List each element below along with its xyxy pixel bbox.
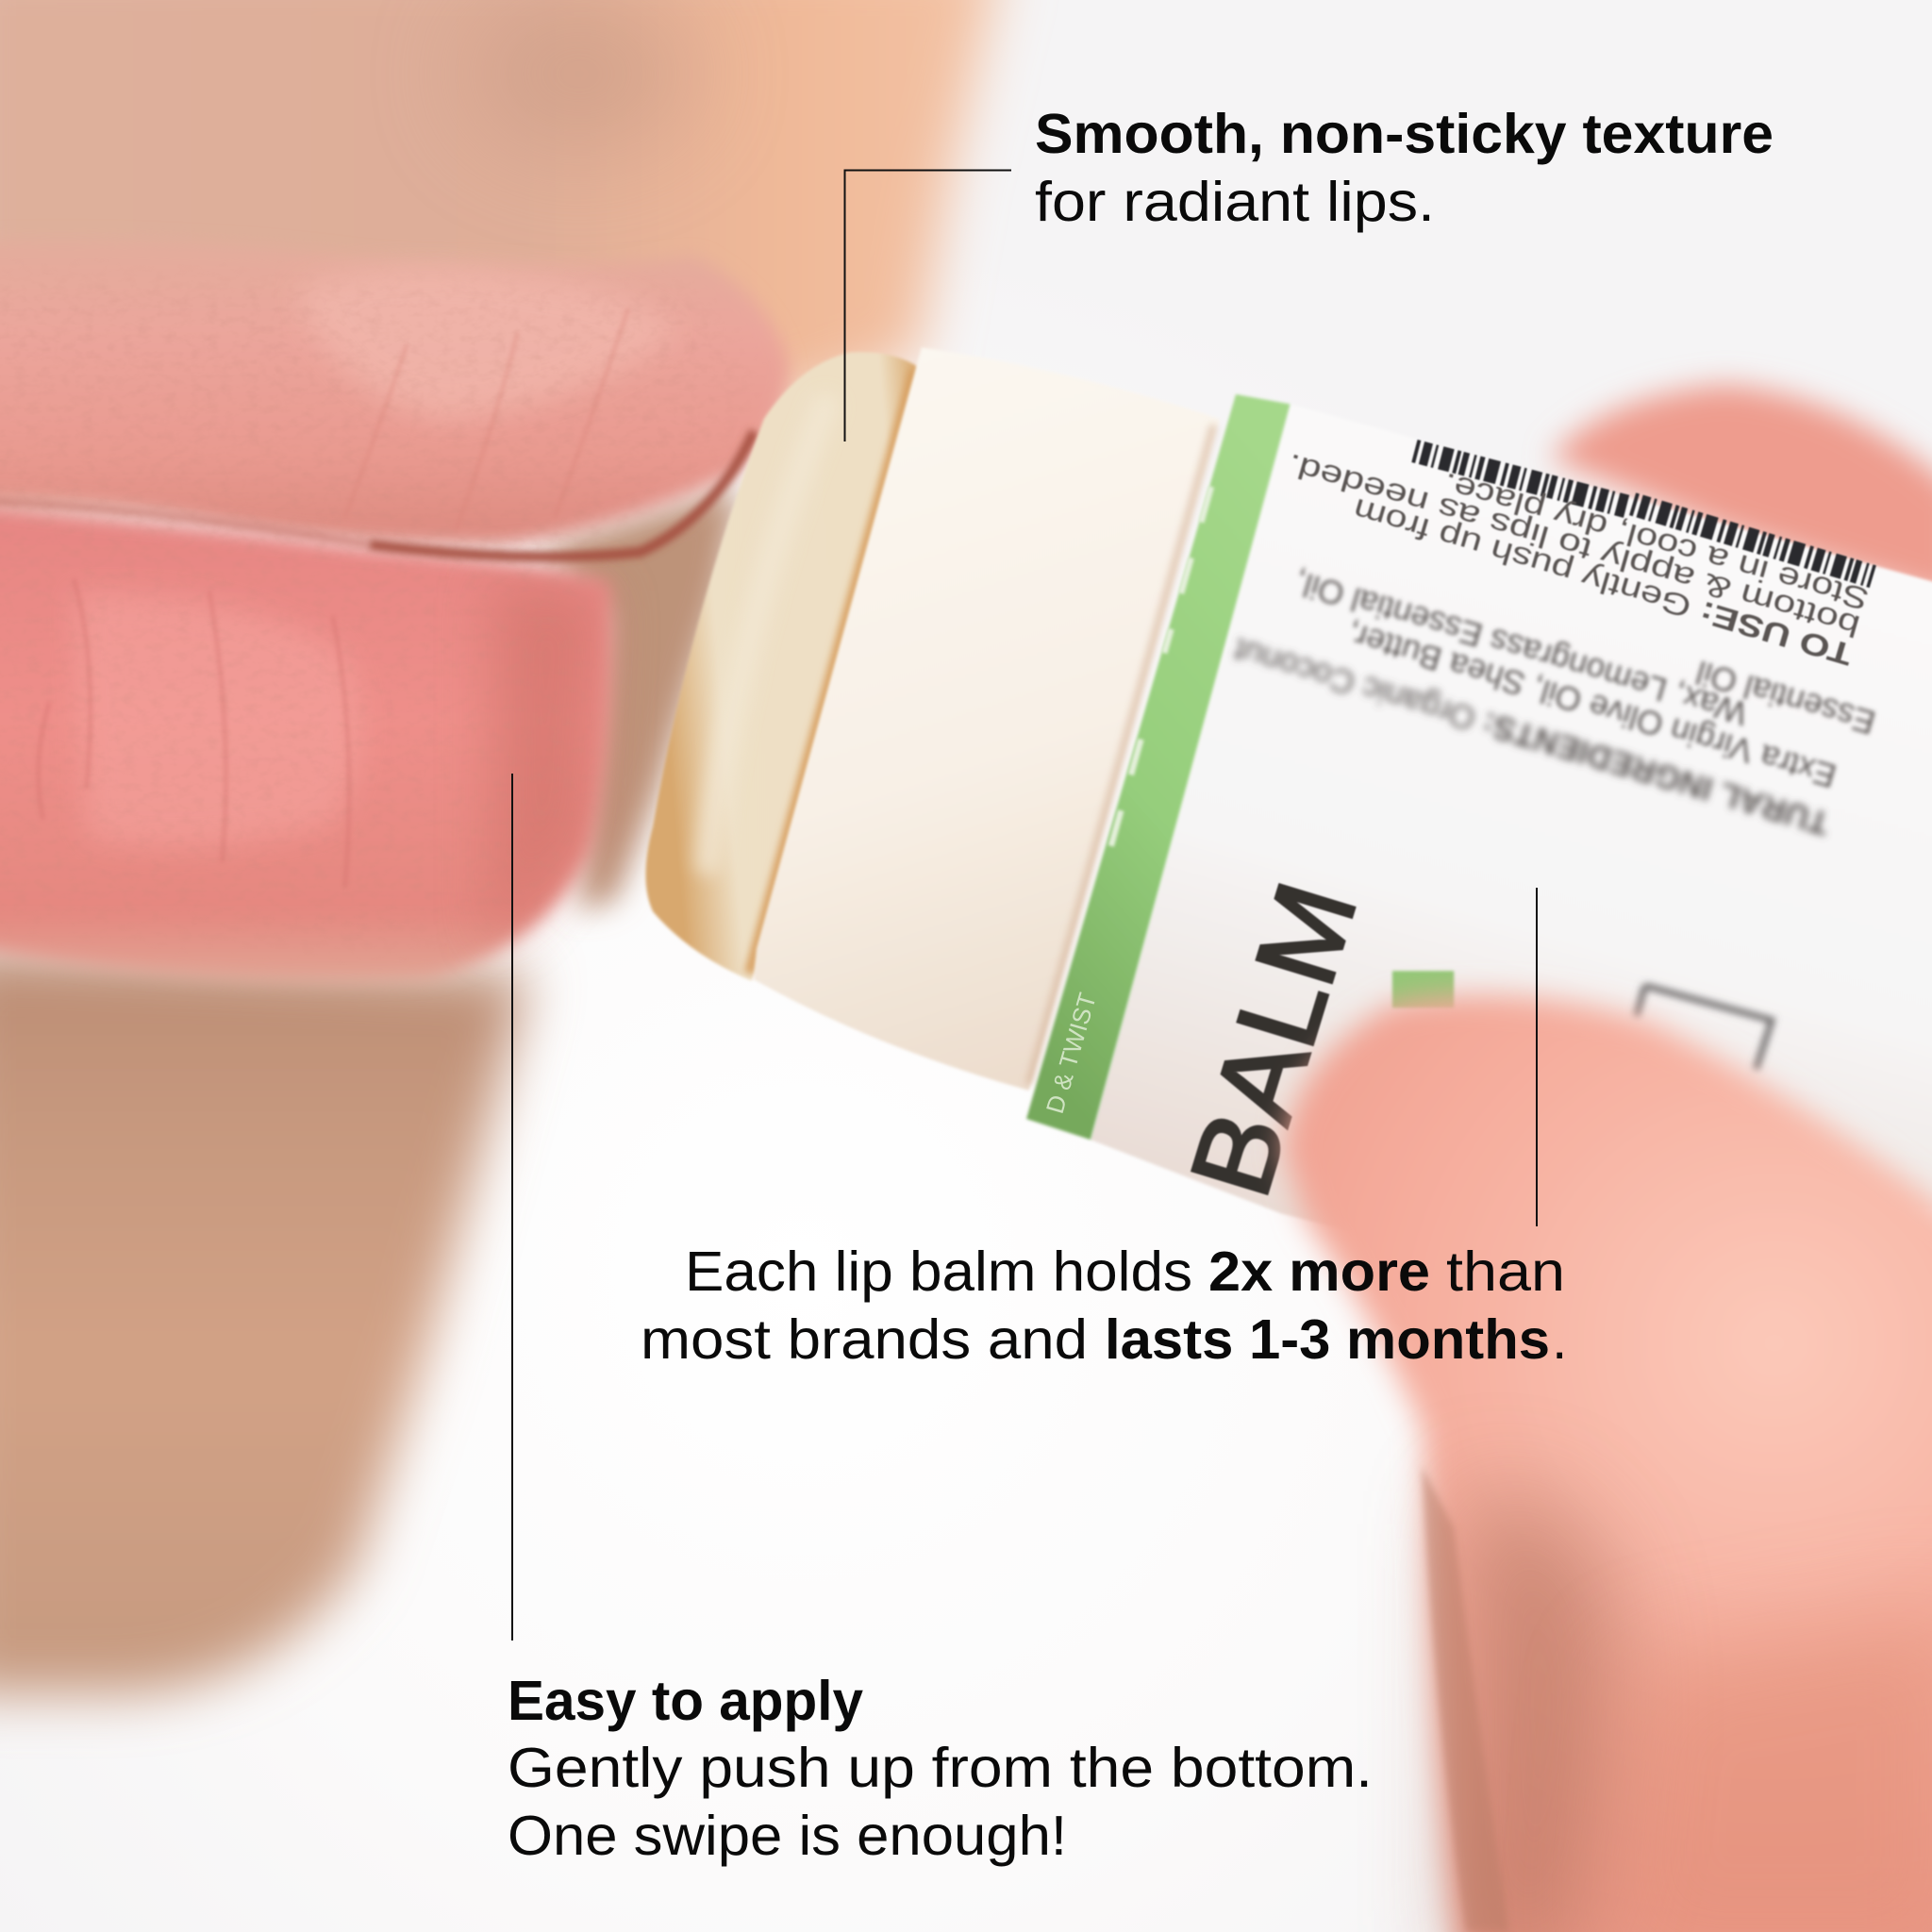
leader line: easy to apply: [511, 774, 513, 1641]
text: each lip balm holds: Each lip balm holds: [685, 1241, 1192, 1303]
photo: lip skin texture: [0, 234, 789, 986]
photo: box icon on label: [1637, 986, 1772, 1070]
heading: smooth texture: Smooth, non-sticky texture: [1035, 103, 1774, 165]
heading: easy to apply: Easy to apply: [508, 1670, 863, 1732]
text: one swipe: One swipe is enough!: [508, 1805, 1067, 1867]
photo: mouth line left: [0, 500, 370, 544]
photo: thumb shadow: [1466, 1491, 1616, 1932]
photo: upper face skin: [0, 0, 1004, 518]
photo: lower lip right shade: [492, 579, 604, 949]
photo: lower lip crease: [38, 579, 349, 887]
text: period: .: [1552, 1308, 1567, 1371]
photo: thumb: [1284, 995, 1932, 1932]
photo: balm wax top: [645, 352, 918, 981]
photo: balm wax highlight: [708, 407, 825, 862]
photo: green band text: D & TWIST: [1041, 990, 1102, 1117]
text: gently push: Gently push up from the bottom.: [508, 1737, 1373, 1799]
photo: storage line: Store in a cool, dry place.: [1439, 466, 1873, 618]
text: 2x more: 2x more: [1208, 1241, 1430, 1303]
photo: upper lip creases: [345, 308, 628, 530]
callout: smooth texture: [845, 103, 1774, 441]
photo: upper lip highlight: [295, 267, 677, 419]
text: lasts 1-3 months: lasts 1-3 months: [1105, 1308, 1550, 1371]
photo: wax orange rim: [749, 370, 914, 974]
leader line: holds more: [1536, 888, 1538, 1226]
photo: ingredients heading: TURAL INGREDIENTS: Organic Coconut: [1230, 631, 1833, 841]
photo: usage text: [1283, 447, 1873, 673]
photo: barcode: [1414, 451, 1873, 576]
text: radiant lips: for radiant lips.: [1035, 171, 1435, 233]
photo: ingredients text upper: [1291, 563, 1880, 794]
photo: green band: [1026, 394, 1291, 1140]
photo: green mark: [1392, 971, 1454, 1008]
photo: thumb lower warm tone: [1602, 1602, 1932, 1932]
text: most brands and: most brands and: [641, 1308, 1088, 1371]
photo: lower lip highlight: [74, 591, 361, 848]
photo: essential oil line: Essential Oil: [1692, 653, 1880, 741]
photo: directions line 2: bottom & apply to lips as needed.: [1283, 447, 1863, 644]
callout: holds more: [641, 888, 1567, 1371]
callout: easy to apply: [508, 774, 1373, 1867]
photo: mouth line right: [370, 431, 754, 557]
photo: tube shadow by band: [1029, 425, 1214, 1084]
photo: white tube: [754, 347, 1220, 1091]
text: than: than: [1446, 1241, 1565, 1303]
photo: wax line: Wax, Lemongrass Essential Oil,: [1291, 563, 1752, 732]
photo: thumb lower edge skin: [1422, 1466, 1509, 1932]
photo: olive oil line: Extra Virgin Olive Oil, Shea Butter,: [1343, 615, 1840, 794]
photo: directions line 1: TO USE: Gently push up from: [1349, 492, 1857, 673]
photo: label: [1091, 404, 1932, 1232]
photo: green band dashes: [1107, 487, 1211, 862]
photo: shadow between lips and balm: [542, 487, 740, 912]
photo: chin: [0, 949, 530, 1694]
photo: lower lip: [0, 506, 611, 982]
photo: upper finger: [1550, 385, 1932, 604]
photo: BALM label: BALM: [1167, 869, 1380, 1209]
leader line: texture: [845, 170, 1011, 441]
photo: darker skin patch above lip: [468, 0, 690, 148]
photo: upper lip: [0, 239, 789, 545]
